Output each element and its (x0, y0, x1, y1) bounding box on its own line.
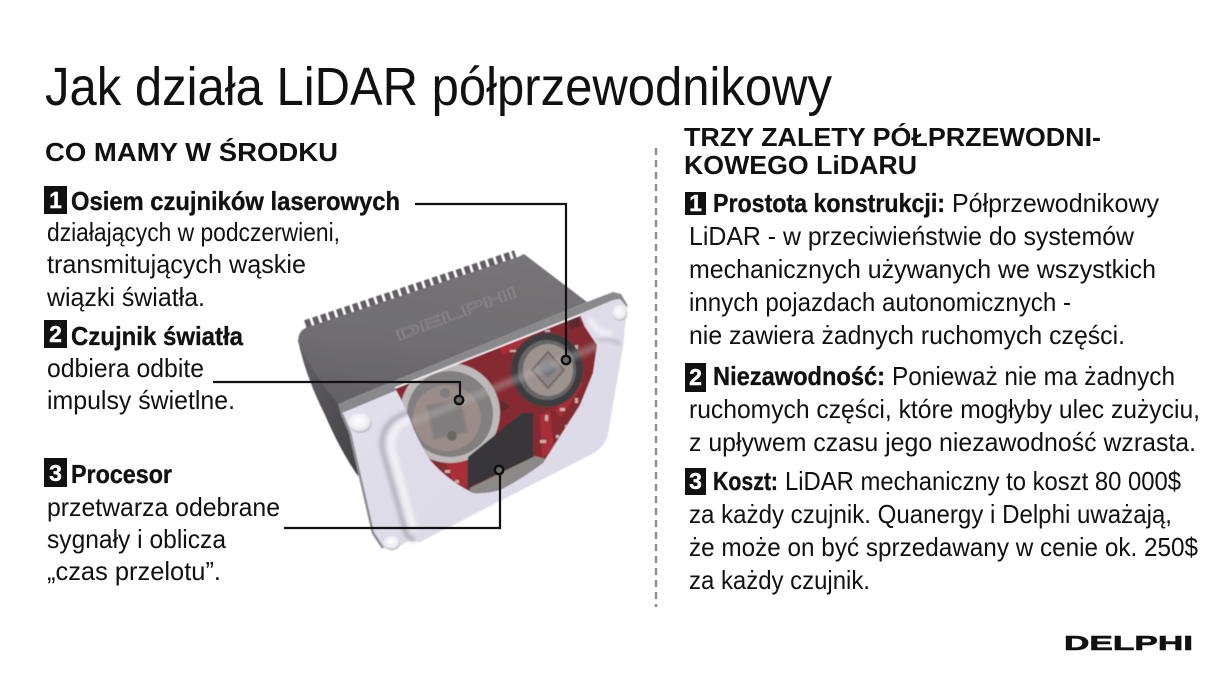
item 2: czujnik światła: 2 (49, 321, 62, 347)
board mottling (445, 335, 583, 488)
advantage 1: prostota konstrukcji: Półprzewodnikowy (952, 188, 1159, 218)
flange edge (338, 292, 628, 418)
device housing (298, 254, 587, 404)
advantage 1: prostota konstrukcji: innych pojazdach autonomicznych - (689, 287, 1071, 317)
item 1: czujniki laserowe (44, 186, 400, 312)
heading: trzy zalety (684, 122, 1101, 180)
item 3: procesor: „czas przelotu”. (47, 556, 221, 586)
cut seam (395, 315, 580, 388)
haze band across lenses (405, 345, 600, 425)
housing fins (306, 256, 516, 326)
advantage 2: niezawodność: Ponieważ nie ma żadnych (892, 361, 1175, 391)
lower housing interior (469, 455, 546, 494)
advantage 2: niezawodność: z upływem czasu jego niezawodność wzrasta. (689, 427, 1196, 457)
advantage 3: koszt: za każdy czujnik. Quanergy i Delphi uważają, (689, 499, 1172, 529)
item 1: czujniki laserowe: Osiem czujników laserowych (71, 186, 400, 216)
leader line 3 (284, 466, 503, 528)
heading: trzy zalety: TRZY ZALETY PÓŁPRZEWODNI- (684, 122, 1101, 152)
flange left rim shadow (342, 414, 383, 548)
cutaway: circuit board (395, 315, 598, 494)
leader line 2 (213, 382, 463, 404)
item 2: czujnik światła (44, 320, 243, 415)
advantage 3: koszt: Koszt: (713, 466, 778, 496)
illustration: LiDAR device (298, 254, 628, 551)
advantage 1: prostota konstrukcji: nie zawiera żadnych ruchomych części. (689, 320, 1125, 350)
advantage 1: prostota konstrukcji: LiDAR - w przeciwieństwie do systemów (689, 221, 1134, 251)
panel: trzy zalety (684, 122, 1200, 595)
panel: co mamy w środku (44, 137, 400, 586)
heading: co mamy w środku: CO MAMY W ŚRODKU (45, 137, 338, 167)
item 3: procesor: przetwarza odebrane (47, 492, 280, 522)
advantage 3: koszt (685, 466, 1199, 595)
advantage 1: prostota konstrukcji: 1 (689, 190, 702, 216)
housing logo: DELPHI (393, 284, 519, 345)
chip: processor (468, 413, 533, 488)
advantage 2: niezawodność (685, 361, 1200, 457)
logo: Delphi: DELPHI (1064, 633, 1193, 655)
advantage 1: prostota konstrukcji: mechanicznych używanych we wszystkich (689, 254, 1156, 284)
mounting flange (342, 299, 627, 551)
item 1: czujniki laserowe: transmitujących wąskie (47, 249, 306, 279)
advantage 1: prostota konstrukcji (685, 188, 1159, 350)
advantage 3: koszt: za każdy czujnik. (689, 565, 870, 595)
item 3: procesor: 3 (49, 460, 62, 486)
title: Jak działa LiDAR półprzewodnikowy (45, 57, 832, 117)
item 2: czujnik światła: impulsy świetlne. (47, 385, 235, 415)
item 1: czujniki laserowe: wiązki światła. (46, 282, 205, 312)
housing side shadow (298, 340, 375, 476)
advantage 2: niezawodność: Niezawodność: (713, 361, 885, 391)
item 2: czujnik światła: Czujnik światła (71, 321, 243, 351)
leader line 1 (415, 204, 570, 364)
item 2: czujnik światła: odbiera odbite (47, 353, 204, 383)
flange bolts (348, 305, 628, 550)
flange ridge shading (382, 412, 414, 541)
dashed divider (655, 148, 657, 607)
item 3: procesor: sygnały i oblicza (47, 524, 227, 554)
advantage 1: prostota konstrukcji: Prostota konstrukcji: (713, 188, 945, 218)
heading: trzy zalety: KOWEGO LiDARU (684, 150, 917, 180)
advantage 3: koszt: LiDAR mechaniczny to koszt 80 000$ (785, 466, 1181, 496)
advantage 2: niezawodność: ruchomych części, które mogłyby ulec zużyciu, (689, 394, 1200, 424)
item 1: czujniki laserowe: działających w podczerwieni, (47, 217, 340, 247)
advantage 3: koszt: że może on być sprzedawany w cenie ok. 250$ (689, 532, 1199, 562)
lens: light sensor (400, 363, 500, 463)
item 3: procesor: Procesor (71, 459, 172, 489)
advantage 2: niezawodność: 2 (689, 364, 702, 390)
item 3: procesor (44, 458, 280, 586)
advantage 3: koszt: 3 (689, 468, 702, 494)
item 1: czujniki laserowe: 1 (49, 187, 62, 213)
lens: laser sensor (511, 333, 583, 407)
